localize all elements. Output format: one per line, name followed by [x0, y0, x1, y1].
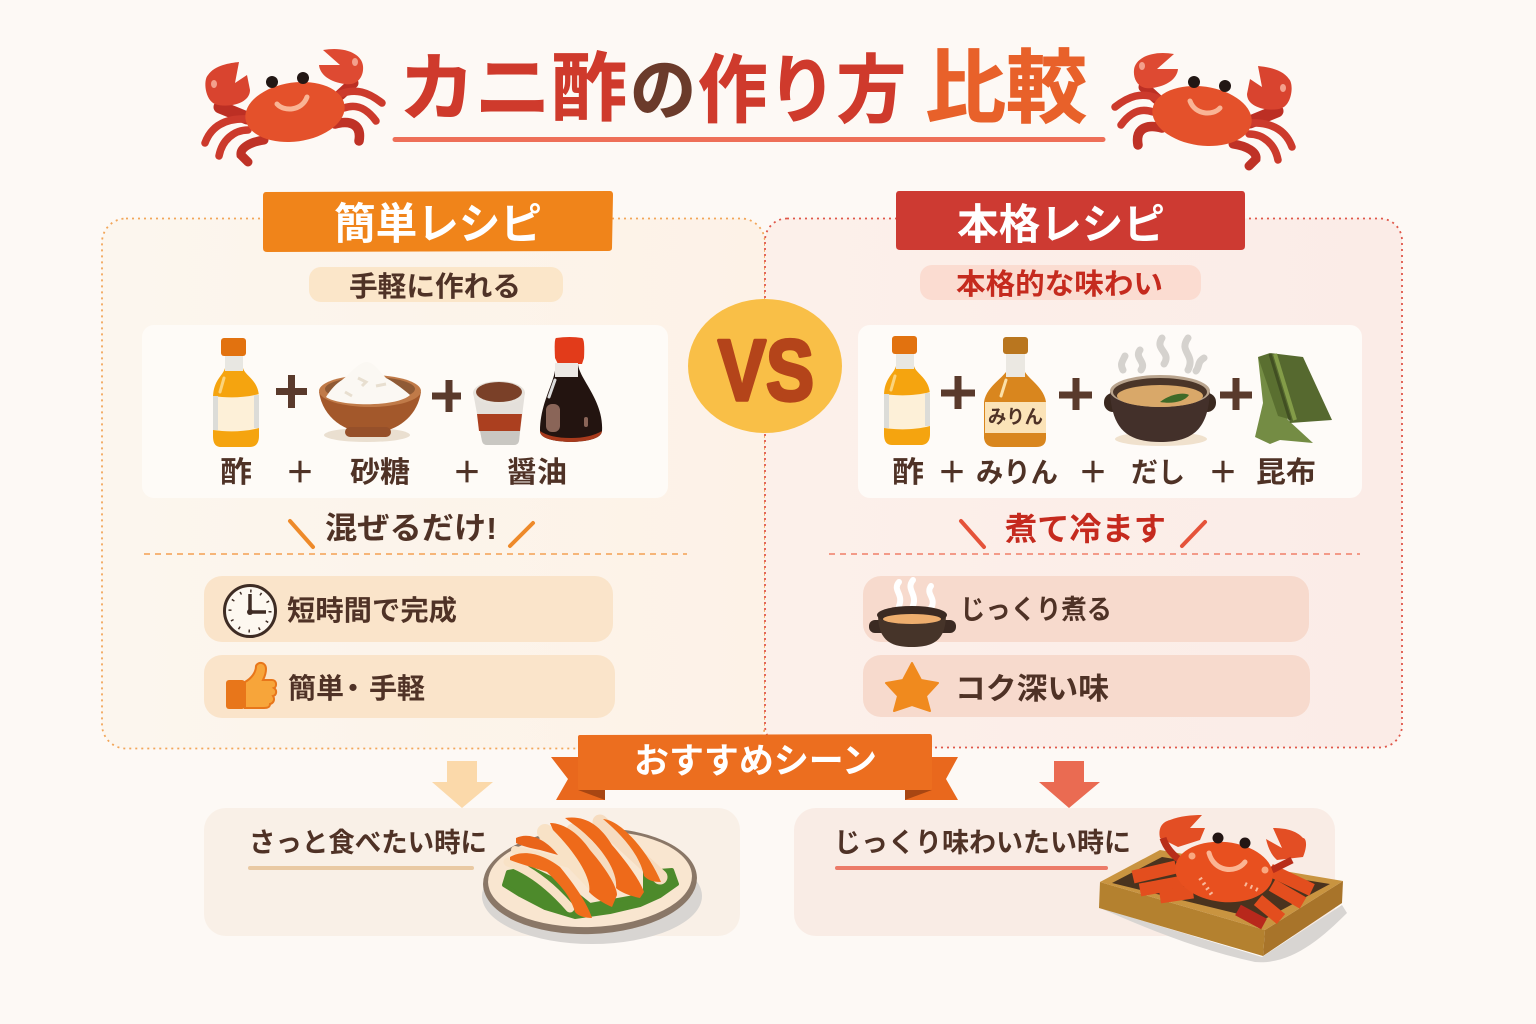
feature: slow simmer: じっくり煮る [960, 595, 1112, 625]
plus sign [432, 380, 461, 412]
ingredient labels [220, 456, 567, 490]
heading: easy recipe [263, 191, 613, 252]
method text: 煮て冷ます [1005, 511, 1166, 547]
feature: easy [204, 655, 615, 718]
plus sign [1059, 378, 1092, 410]
subheading pill: 手軽に作れる [349, 271, 521, 302]
leg 5 [600, 822, 660, 877]
icon: mirin bottle [984, 337, 1046, 447]
title: 比較 [925, 44, 1087, 133]
ingredient labels: ＋ [937, 457, 967, 490]
ribbon: recommended scenes [551, 734, 958, 800]
icon: mirin bottle: みりん [988, 406, 1043, 428]
title [205, 44, 1292, 166]
ingredient labels: 砂糖 [350, 456, 410, 489]
feature: short time: 短時間で完成 [287, 595, 457, 626]
ingredient labels: だし [1131, 457, 1185, 488]
ingredient labels: みりん [976, 457, 1058, 488]
ingredients panel [858, 325, 1362, 498]
ingredient labels: ＋ [1078, 457, 1108, 490]
title: 作り方 [698, 49, 906, 132]
method text [290, 511, 533, 547]
title: の [630, 53, 696, 129]
ingredient labels: ＋ [452, 457, 482, 490]
icon: kombu [1255, 353, 1332, 444]
plus sign [1220, 378, 1252, 410]
feature: rich flavour: コク深い味 [955, 673, 1109, 706]
plus sign [276, 375, 307, 408]
illustration: crab on wooden tray [1099, 815, 1347, 962]
panel: easy recipe [102, 191, 765, 748]
scene panel right: じっくり味わいたい時に [834, 828, 1131, 858]
VS badge [688, 299, 842, 433]
ribbon: recommended scenes: おすすめシーン [634, 742, 877, 781]
subheading pill: 本格的な味わい [956, 268, 1163, 301]
heading: authentic recipe: 本格レシピ [957, 201, 1165, 248]
arrow left [432, 761, 493, 808]
method text: 混ぜるだけ! [325, 511, 497, 546]
feature: easy: ・ [339, 673, 367, 704]
ingredient labels: ＋ [285, 457, 315, 490]
panel: authentic recipe [765, 191, 1402, 748]
leg 2 [516, 836, 558, 855]
ingredient labels: ＋ [1208, 457, 1238, 490]
scene panel right [794, 808, 1335, 936]
feature: rich flavour [863, 655, 1310, 717]
heading: easy recipe: 簡単レシピ [334, 201, 542, 249]
heading: authentic recipe [896, 191, 1245, 250]
icon: vinegar bottle [213, 338, 259, 447]
feature: easy: 手軽 [369, 673, 425, 704]
icon: sugar bowl [319, 362, 421, 442]
icon: vinegar bottle [884, 336, 930, 445]
subheading pill [309, 267, 563, 302]
title underline [395, 137, 1103, 142]
icon: thumbs up [226, 663, 276, 709]
subheading pill [920, 265, 1201, 301]
icon: soy sauce cup [473, 381, 525, 445]
plus sign [941, 376, 975, 409]
leg 4 [573, 830, 622, 884]
crab icon left [205, 49, 382, 162]
ingredient labels: 酢 [892, 456, 924, 489]
scene panel left: さっと食べたい時に [249, 828, 487, 858]
ingredient labels [892, 456, 1316, 490]
crab icon right [1115, 53, 1292, 166]
feature: slow simmer [863, 576, 1309, 647]
scene panel left [204, 808, 740, 936]
feature: easy: 簡単 [288, 673, 344, 704]
icon: simmering pot [869, 580, 956, 647]
ingredient labels: 醤油 [507, 456, 567, 489]
illustration: crab legs on plate [481, 817, 702, 944]
method text [961, 511, 1205, 547]
icon: soy sauce bottle [540, 337, 602, 442]
VS badge: VS [718, 323, 814, 419]
icon: dashi pot [1104, 338, 1216, 446]
feature: short time [204, 576, 613, 642]
ingredient labels: 昆布 [1256, 456, 1316, 489]
ingredients panel [142, 325, 668, 498]
icon: clock [224, 586, 276, 636]
icon: star [886, 663, 938, 711]
leg 1 [508, 862, 570, 908]
title text: カニ酢 [399, 47, 627, 130]
arrow right [1039, 761, 1100, 808]
leg 3 [545, 832, 595, 884]
ingredient labels: 酢 [220, 456, 252, 489]
